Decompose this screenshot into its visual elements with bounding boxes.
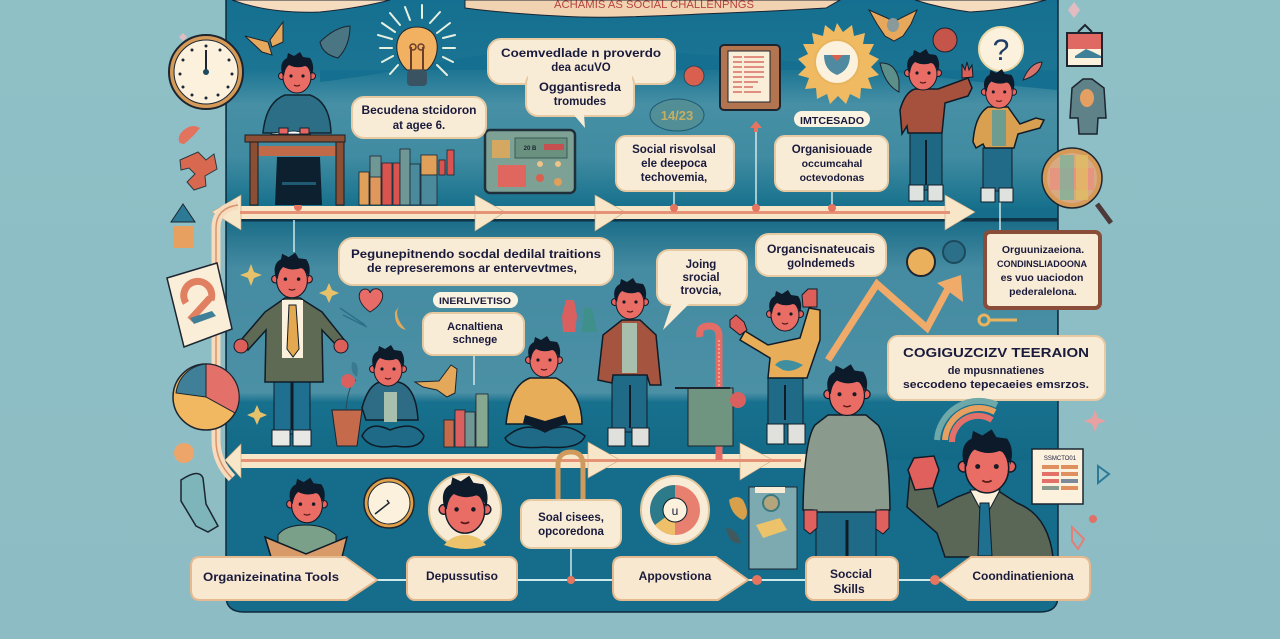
label: Coordination arrow <box>940 557 1090 600</box>
pill: INERLIVETISO <box>433 292 518 308</box>
icon: leaf pair <box>880 62 1042 92</box>
icon: ribbon card <box>167 263 232 347</box>
icon: butterfly <box>245 22 283 55</box>
text box: social: techovemia, <box>641 172 707 184</box>
person: boy in yellow jacket <box>973 69 1044 202</box>
bottom connector line <box>377 575 940 585</box>
icon: bottom left coin and stone <box>174 443 218 532</box>
text box: schnege <box>423 313 524 355</box>
text box: schnege: schnege <box>453 334 497 346</box>
text box: joining speech <box>657 250 747 330</box>
icon: document <box>720 45 780 110</box>
icon: potted plant <box>332 362 362 446</box>
text box: joining speech: Joing <box>686 259 716 271</box>
text box: brown frame: es vuo uaciodon <box>1001 272 1083 284</box>
text box: organise <box>775 136 888 191</box>
pill: INERLIVETISO: INERLIVETISO <box>439 296 511 307</box>
text box: cognition: seccodeno tepecaeies emsrzos. <box>903 379 1089 391</box>
main panel <box>226 0 1058 612</box>
text box: social crises: opcoredona <box>538 526 605 538</box>
text box: organise bubble: golndemeds <box>787 258 855 270</box>
text box: wide speech: de represeremons ar entervevtmes, <box>367 263 577 275</box>
label: Social Skills <box>806 557 898 600</box>
icon: box <box>675 388 746 446</box>
speech bubble: Coemvedlade n proverdo <box>501 48 661 60</box>
person: waving boy in yellow <box>730 289 820 444</box>
text box: brown frame: Orguunizaeiona. <box>1002 244 1084 256</box>
icon: coins <box>684 28 957 86</box>
person: hoodie teen <box>803 364 890 560</box>
text box: brown frame: pederalelona. <box>1009 286 1077 298</box>
person: reading boy bottom <box>265 478 347 557</box>
text box: cognition <box>888 336 1105 400</box>
icon: rainbow <box>937 401 997 442</box>
text box: social <box>616 136 734 191</box>
person: boy in suit <box>234 253 348 446</box>
text box: wide speech: Pegunepitnendo socdal dedilal traitions <box>351 249 601 261</box>
pill: IMTCESADO <box>794 111 870 127</box>
person: reading boy <box>505 336 585 448</box>
person: boy in red jacket waving <box>900 49 973 201</box>
text box: schnege: Acnaltiena <box>447 321 504 333</box>
text box: brown frame: CONDINSLIADOONA <box>997 259 1087 270</box>
icon: padlock loop <box>558 452 583 500</box>
icon: wheel: u <box>672 504 678 518</box>
icon: magnifier <box>1042 148 1111 223</box>
icon: coin and key <box>907 241 1017 325</box>
icon: picture <box>1067 25 1102 66</box>
right doodles <box>1072 410 1109 549</box>
label: Social Skills: Soccial <box>830 567 872 581</box>
icon: question mark <box>979 27 1023 71</box>
pie chart <box>173 364 239 430</box>
growth arrow <box>828 275 963 360</box>
text box: cognition: de mpusnnatienes <box>948 365 1044 377</box>
text box: organise: octevodonas <box>800 172 865 184</box>
label: Organizing tools arrow: Organizeinatina Tools <box>203 570 339 584</box>
bar chart: books <box>444 394 488 447</box>
icon: clipboard <box>1032 449 1083 504</box>
badge: faded label: 14/23 <box>661 108 693 123</box>
icon: wheel <box>641 476 709 544</box>
label: Appovstiona arrow: Appovstiona <box>639 569 712 583</box>
person: sitting boy in teal hoodie <box>362 345 424 447</box>
icon: leaf <box>320 26 350 58</box>
icon: light bulb <box>378 5 455 86</box>
icon: coat <box>1070 79 1106 134</box>
text box: social: ele deepoca <box>641 158 708 170</box>
speech bubble: dea acuVO <box>551 62 611 74</box>
text box: organise bubble: Organcisnateucais <box>767 244 875 256</box>
text box: social: Social risvolsal <box>632 144 716 156</box>
icon: question mark: ? <box>993 34 1009 67</box>
icon: clock <box>169 35 243 109</box>
label: Appovstiona arrow <box>613 557 748 600</box>
text box: wide speech <box>339 238 613 285</box>
timeline arrow 1 <box>212 195 1058 231</box>
icon: small figures <box>562 300 597 332</box>
person: boy in brown jacket <box>598 278 661 446</box>
icon: heart and doodles <box>240 264 406 425</box>
left connector <box>216 205 238 478</box>
speech bubble: tromudes <box>554 96 606 108</box>
text box: age: Becudena stcidoron <box>362 105 476 117</box>
icon: butterfly 2 <box>415 365 457 397</box>
icon: clipboard: SSMCTO01 <box>1044 456 1077 462</box>
icon: clock small <box>364 478 414 528</box>
top banners <box>232 0 1046 17</box>
pill: IMTCESADO: IMTCESADO <box>800 115 864 127</box>
text box: age: at agee 6. <box>393 120 445 132</box>
label: Social Skills: Skills <box>833 582 865 596</box>
icon: device dashboard <box>485 130 575 193</box>
text box: organise bubble <box>756 234 886 276</box>
speech bubble <box>488 39 675 128</box>
label: Coordination arrow: Coondinatieniona <box>972 569 1074 583</box>
badge: faded label <box>650 99 704 131</box>
label: Organizing tools arrow <box>191 557 377 600</box>
connector stems <box>294 121 1000 580</box>
label: Depussutiso <box>407 557 517 600</box>
person: student at desk <box>245 52 345 205</box>
text box: joining speech: trovcia, <box>681 285 721 297</box>
icon: wings <box>869 10 917 41</box>
label: Depussutiso: Depussutiso <box>426 569 498 583</box>
text box: age <box>352 97 486 138</box>
text box: organise: occumcahal <box>802 158 862 170</box>
text box: cognition: COGIGUZCIZV TEERAION <box>903 346 1089 360</box>
text box: organise: Organisiouade <box>792 144 872 156</box>
icon: portrait <box>429 474 501 549</box>
person: big suit boy <box>907 429 1053 557</box>
bar chart <box>359 149 454 205</box>
text box: joining speech: srocial <box>682 272 720 284</box>
text box: social crises: Soal cisees, <box>538 512 604 524</box>
text box: social crises <box>521 500 621 548</box>
text box: brown frame <box>985 232 1100 308</box>
icon: house tag <box>171 204 195 248</box>
speech bubble: Oggantisreda <box>539 82 622 94</box>
icon: document and coil <box>726 487 797 569</box>
icon: puzzle and side doodles <box>179 2 1080 190</box>
timeline arrow 2 <box>225 442 806 480</box>
icon: sun <box>798 23 879 104</box>
icon: device dashboard: 20 B <box>524 146 537 152</box>
icon: measuring cane <box>700 326 719 460</box>
